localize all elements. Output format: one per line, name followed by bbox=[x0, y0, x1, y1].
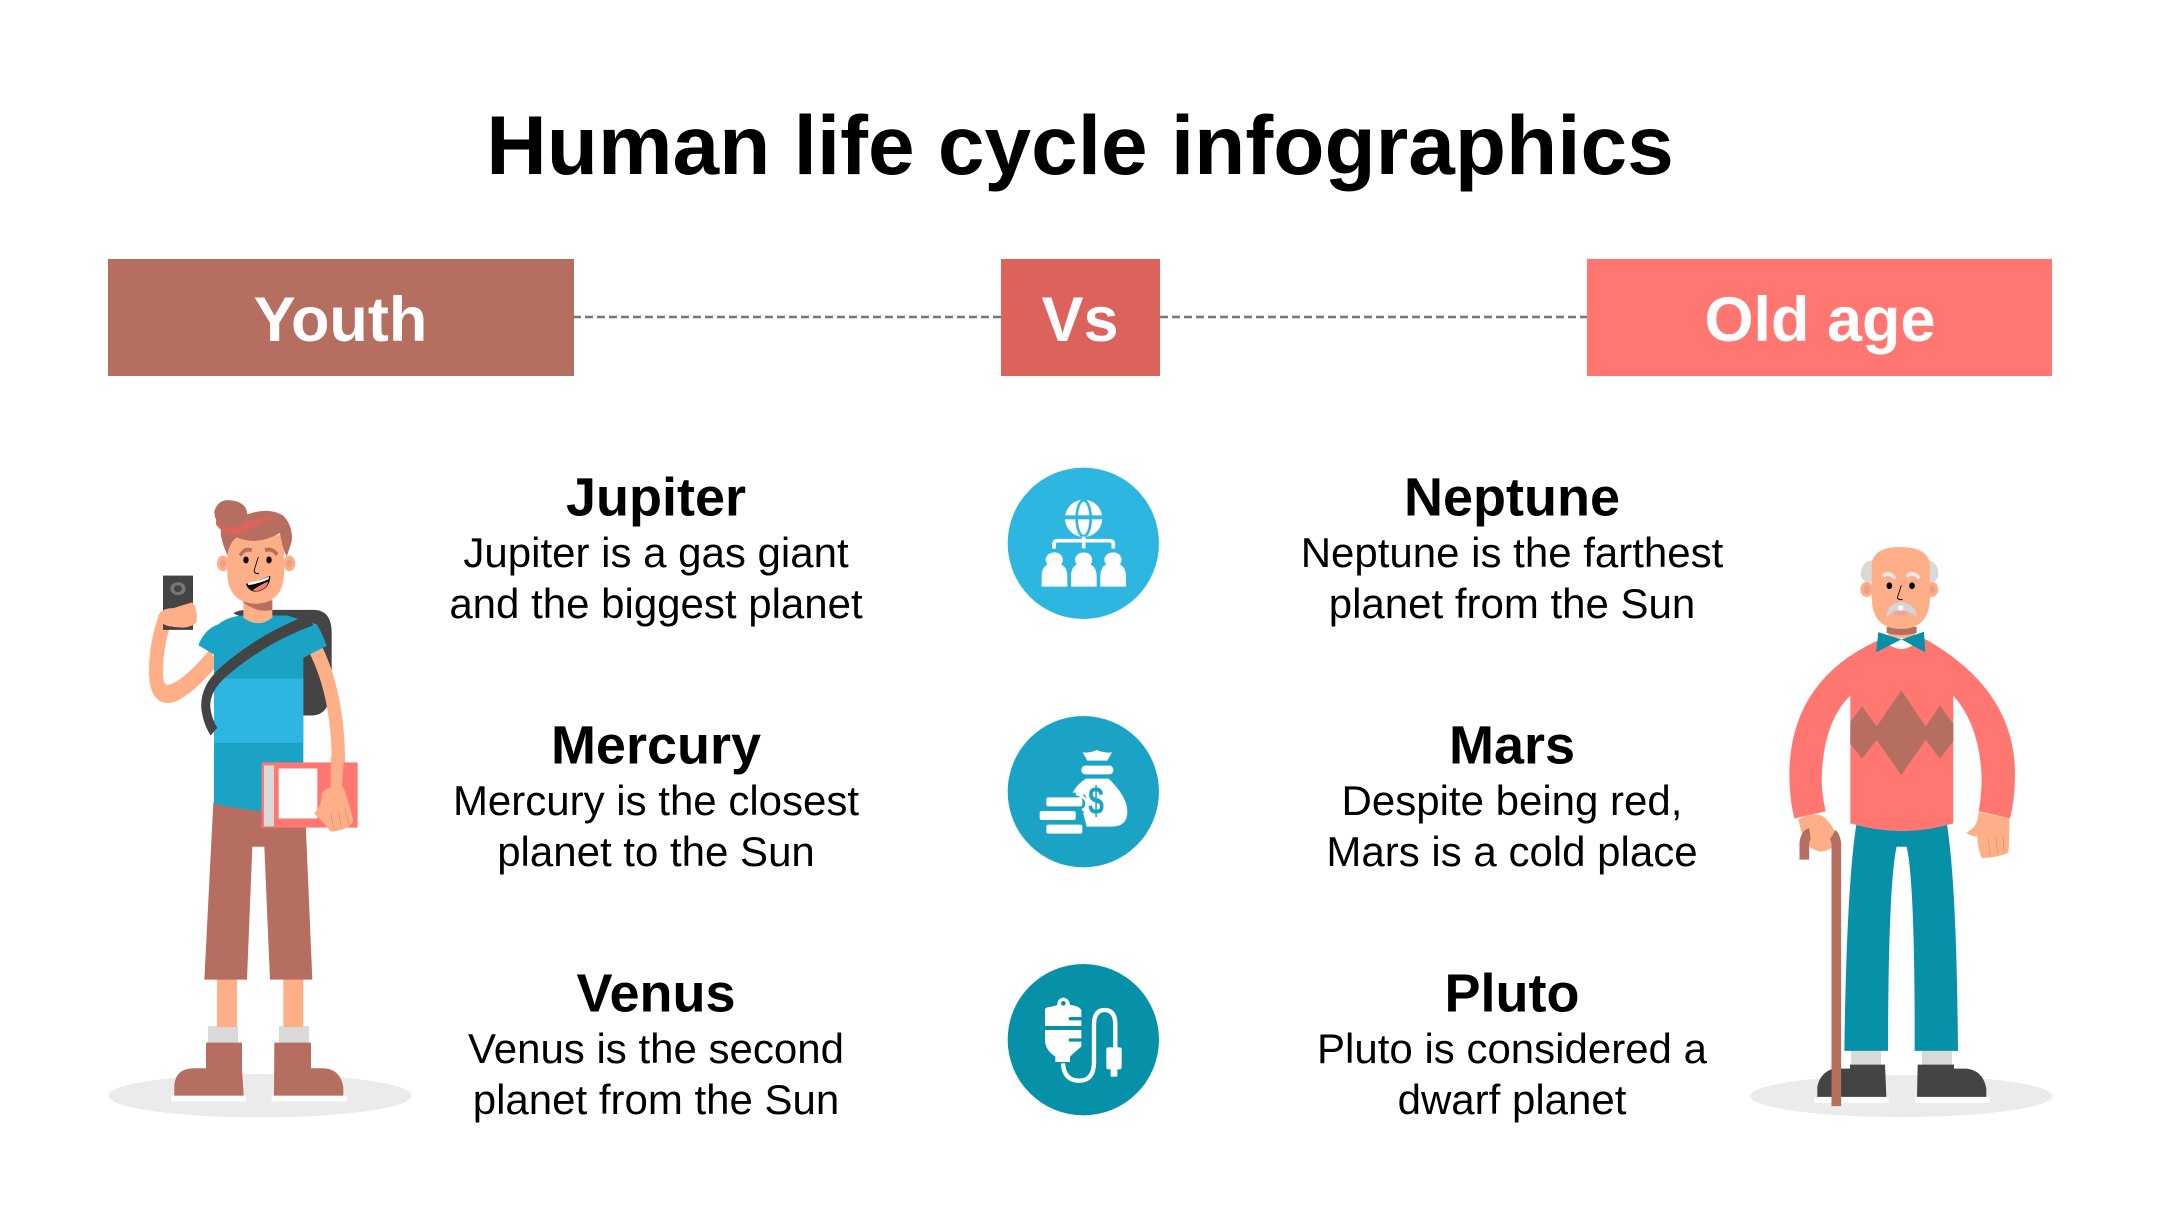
right text: Pluto: Pluto is considered a bbox=[1317, 1025, 1708, 1072]
header: Old age: Old age bbox=[1704, 285, 1936, 355]
upper arms bbox=[156, 620, 338, 794]
sweater diamonds bbox=[1850, 690, 1953, 775]
left hand bbox=[1798, 814, 1837, 852]
icon: money bag and coins: $ bbox=[1088, 780, 1104, 823]
icon: globe and people network bbox=[1008, 468, 1159, 619]
walking cane bbox=[1804, 834, 1836, 1106]
icon: money bag and coins bbox=[1008, 716, 1159, 867]
sweater bbox=[1789, 639, 2015, 831]
trousers bbox=[1844, 823, 1958, 1051]
left text: Jupiter bbox=[449, 468, 863, 627]
right text: Neptune bbox=[1301, 468, 1724, 627]
figure: young person bbox=[108, 500, 412, 1117]
t-shirt bbox=[198, 616, 327, 813]
figure: elderly man bbox=[1750, 547, 2052, 1117]
bag strap bbox=[206, 620, 312, 732]
left text: Mercury: Mercury is the closest bbox=[453, 777, 859, 824]
shoes bbox=[1814, 1051, 1989, 1103]
left text: Jupiter: and the biggest planet bbox=[449, 580, 863, 627]
shorts bbox=[204, 802, 312, 980]
boots bbox=[171, 1026, 347, 1101]
phone bbox=[163, 576, 193, 630]
right text: Pluto: Pluto bbox=[1445, 964, 1579, 1024]
ground shadow bbox=[1750, 1075, 2052, 1117]
left text: Mercury: planet to the Sun bbox=[497, 828, 815, 875]
left text: Venus: Venus is the second bbox=[468, 1025, 844, 1072]
header: Old age bbox=[1587, 259, 2052, 376]
book bbox=[262, 762, 358, 828]
right text: Neptune: Neptune bbox=[1404, 468, 1620, 528]
right text: Pluto bbox=[1317, 964, 1708, 1123]
header: Vs: Vs bbox=[1041, 285, 1119, 355]
left text: Venus: planet from the Sun bbox=[473, 1076, 839, 1123]
backpack bbox=[233, 610, 332, 715]
right text: Mars bbox=[1326, 716, 1698, 875]
right text: Neptune: Neptune is the farthest bbox=[1301, 529, 1724, 576]
left text: Jupiter: Jupiter is a gas giant bbox=[463, 529, 849, 576]
right text: Neptune: planet from the Sun bbox=[1329, 580, 1695, 627]
header: Youth: Youth bbox=[254, 285, 427, 355]
right text: Mars: Despite being red, bbox=[1342, 777, 1682, 824]
left text: Venus: Venus bbox=[576, 964, 736, 1024]
head bbox=[1860, 547, 1938, 629]
right hand bbox=[1966, 812, 2009, 858]
neck bbox=[243, 600, 272, 623]
right text: Mars: Mars is a cold place bbox=[1326, 828, 1698, 875]
left text: Jupiter: Jupiter bbox=[566, 468, 746, 528]
legs bbox=[217, 978, 303, 1027]
collar and bow tie bbox=[1876, 623, 1925, 652]
header: Youth bbox=[108, 259, 574, 376]
left text: Mercury bbox=[453, 716, 859, 875]
right text: Mars: Mars bbox=[1449, 716, 1575, 776]
title: Human life cycle infographics bbox=[486, 98, 1674, 192]
ground shadow bbox=[108, 1074, 412, 1117]
head bbox=[214, 500, 295, 604]
right text: Pluto: dwarf planet bbox=[1398, 1076, 1627, 1123]
left text: Venus bbox=[468, 964, 844, 1123]
raised hand bbox=[158, 603, 197, 627]
header: Vs bbox=[1001, 259, 1160, 376]
left text: Mercury: Mercury bbox=[551, 716, 761, 776]
lower arm and hand bbox=[314, 757, 353, 832]
icon: IV drip bag bbox=[1008, 964, 1159, 1115]
